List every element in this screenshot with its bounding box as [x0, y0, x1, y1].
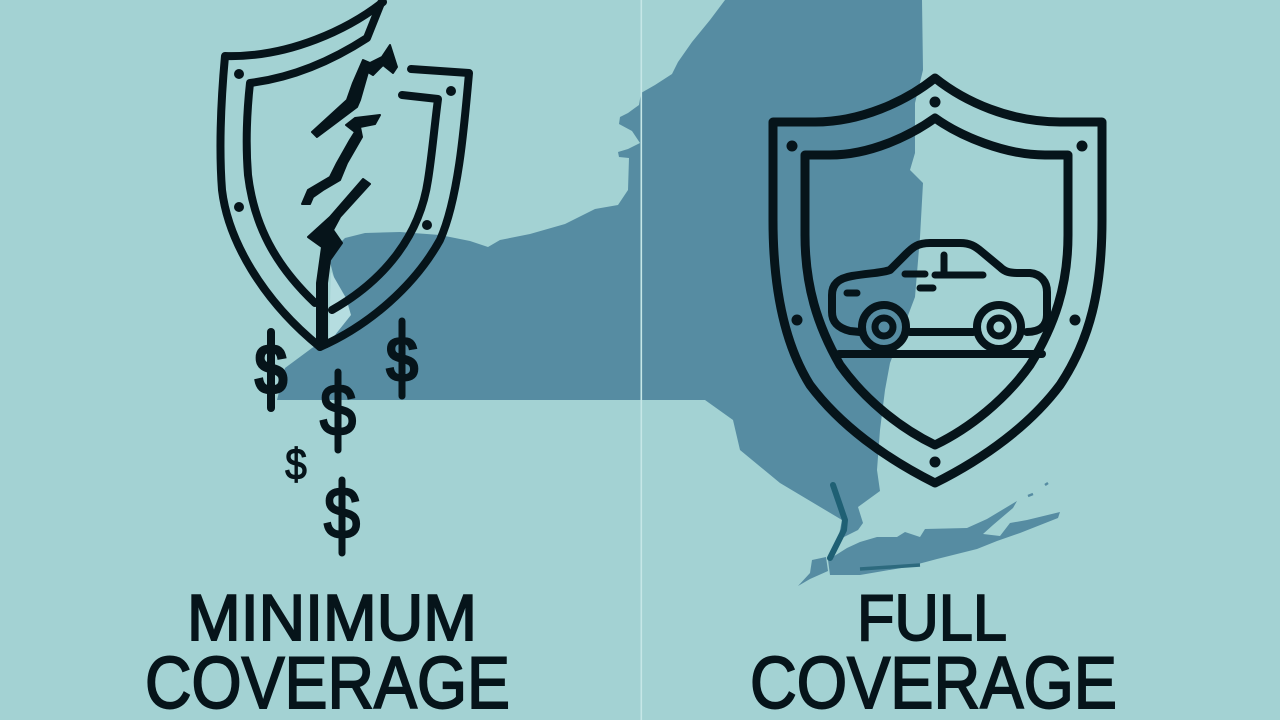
- icon: falling dollar signs: [254, 321, 419, 554]
- dollar sign 3: $: [320, 370, 356, 451]
- heading: minimum coverage: [145, 581, 510, 720]
- map: Long Island: [828, 501, 1060, 575]
- dollar sign 4: $: [285, 439, 307, 489]
- map: Staten Island: [798, 557, 828, 586]
- car body: [832, 243, 1047, 332]
- icon: cracked shield: [221, 2, 469, 347]
- map: New York state silhouette: [277, 0, 1060, 586]
- heading: minimum coverage: MINIMUM: [187, 581, 477, 654]
- heading: full coverage: [750, 581, 1117, 720]
- shield rivets: [234, 69, 456, 230]
- light patch behind shield tip: [329, 272, 351, 340]
- map: south shore channel: [860, 565, 920, 569]
- heading: full coverage: FULL: [857, 581, 1007, 654]
- car rear wheel: [977, 305, 1021, 349]
- shield inner left edge: [247, 3, 381, 303]
- icon: car: [832, 243, 1047, 354]
- road line: [839, 350, 1042, 358]
- dollar sign 2: $: [385, 324, 419, 397]
- car window details: [847, 255, 983, 293]
- shield outer right edge: [320, 69, 469, 347]
- shield inner right edge: [332, 95, 438, 310]
- divider line: [640, 0, 642, 720]
- dollar sign 5: $: [324, 473, 360, 554]
- map: Hudson river: [830, 485, 845, 558]
- map: small islands: [1028, 483, 1048, 496]
- shield rivets: [786, 96, 1088, 468]
- dollar sign 1: $: [254, 330, 288, 410]
- icon: intact shield with car: [773, 78, 1102, 483]
- car front wheel: [862, 305, 906, 349]
- shield outer edge: [773, 78, 1102, 483]
- shield outer left edge: [221, 2, 383, 347]
- shield crack: [302, 45, 397, 347]
- shield inner edge: [805, 118, 1068, 445]
